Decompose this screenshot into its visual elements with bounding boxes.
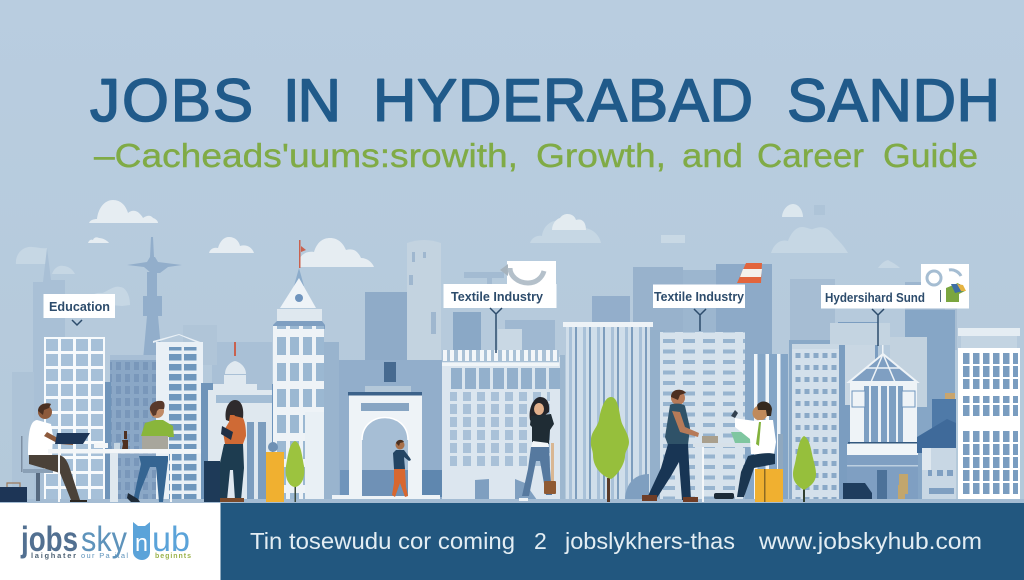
- footer text: jobslykhers-thas: [564, 528, 735, 554]
- banded tower: [153, 334, 203, 500]
- striped building: [563, 322, 653, 500]
- person: green shirt: [127, 401, 174, 502]
- textile building: [442, 350, 565, 500]
- title: HYDERABAD: [373, 67, 753, 134]
- footer: logo panel: our Pa ital: [81, 551, 128, 560]
- yellow boxes: [755, 469, 783, 502]
- dotted building: [792, 344, 839, 500]
- label: textile industry 1: [444, 261, 556, 353]
- person: woman walking: [519, 397, 556, 501]
- right grid building: [958, 328, 1020, 500]
- logo wordmark: jobs: [20, 520, 78, 559]
- tree left: [286, 441, 304, 502]
- title: JOBS: [90, 67, 253, 134]
- tree middle: [591, 397, 629, 502]
- person: boy: [392, 440, 411, 497]
- meeting table: [48, 431, 201, 502]
- icon: briefcase: [0, 483, 27, 502]
- yellow bin: [266, 442, 284, 502]
- label: textile industry 2: Textile Industry: [654, 290, 744, 304]
- left grid building: [44, 337, 105, 500]
- tower landmark: [127, 237, 182, 360]
- clock tower: [273, 240, 339, 500]
- title: IN: [283, 67, 341, 134]
- label: textile industry 2: [653, 284, 745, 331]
- footer: logo panel: [0, 503, 220, 580]
- person: seated at laptop: [21, 403, 90, 502]
- city buildings: [0, 240, 1024, 503]
- far skyline: [12, 237, 957, 502]
- footer: logo panel: sky: [81, 520, 127, 559]
- person: orange top: [218, 400, 246, 502]
- label: education: Education: [49, 300, 110, 314]
- icon: flag: [737, 263, 762, 283]
- blue house: [917, 393, 956, 500]
- person: seated man in white shirt: [714, 402, 783, 499]
- label: textile industry 1: Textile Industry: [451, 290, 543, 304]
- dome building: [208, 342, 305, 500]
- logo shield letter: n: [135, 530, 148, 557]
- footer text: [250, 528, 982, 554]
- dark building: [105, 355, 156, 500]
- title: [90, 67, 1000, 134]
- label: education: [44, 294, 115, 325]
- tree right: [793, 436, 816, 502]
- ground strip: [0, 499, 1024, 503]
- subtitle: Growth,: [536, 138, 666, 175]
- footer text: 2: [534, 528, 547, 554]
- temple building: [843, 345, 918, 500]
- label: hyderabad sindh: [821, 264, 969, 346]
- title: SANDH: [787, 67, 1000, 134]
- striped slim building: [745, 354, 788, 500]
- trees: [286, 397, 816, 502]
- clouds: [16, 200, 900, 306]
- logo tagline: laighater: [31, 551, 76, 560]
- dark bin: [204, 461, 220, 502]
- footer text: Tin tosewudu cor coming: [250, 528, 515, 554]
- line-window building: [660, 332, 745, 500]
- person: man walking: [642, 390, 699, 502]
- small table: [693, 432, 756, 502]
- subtitle: Career: [757, 138, 864, 175]
- footer: blue band: [220, 503, 1024, 580]
- arch building: [332, 362, 442, 502]
- subtitle: and: [682, 138, 743, 175]
- blue mid block: [201, 383, 213, 500]
- footer text: www.jobskyhub.com: [758, 528, 982, 554]
- logo icon: [133, 522, 150, 560]
- footer: logo panel: beginnts: [155, 553, 191, 560]
- subtitle: –Cacheads'uums:srowith,: [94, 138, 518, 175]
- subtitle: Guide: [883, 138, 978, 175]
- label: hyderabad sindh: Hydersihard Sund: [825, 291, 925, 305]
- subtitle: [94, 138, 978, 175]
- footer: logo panel: ub: [152, 520, 190, 559]
